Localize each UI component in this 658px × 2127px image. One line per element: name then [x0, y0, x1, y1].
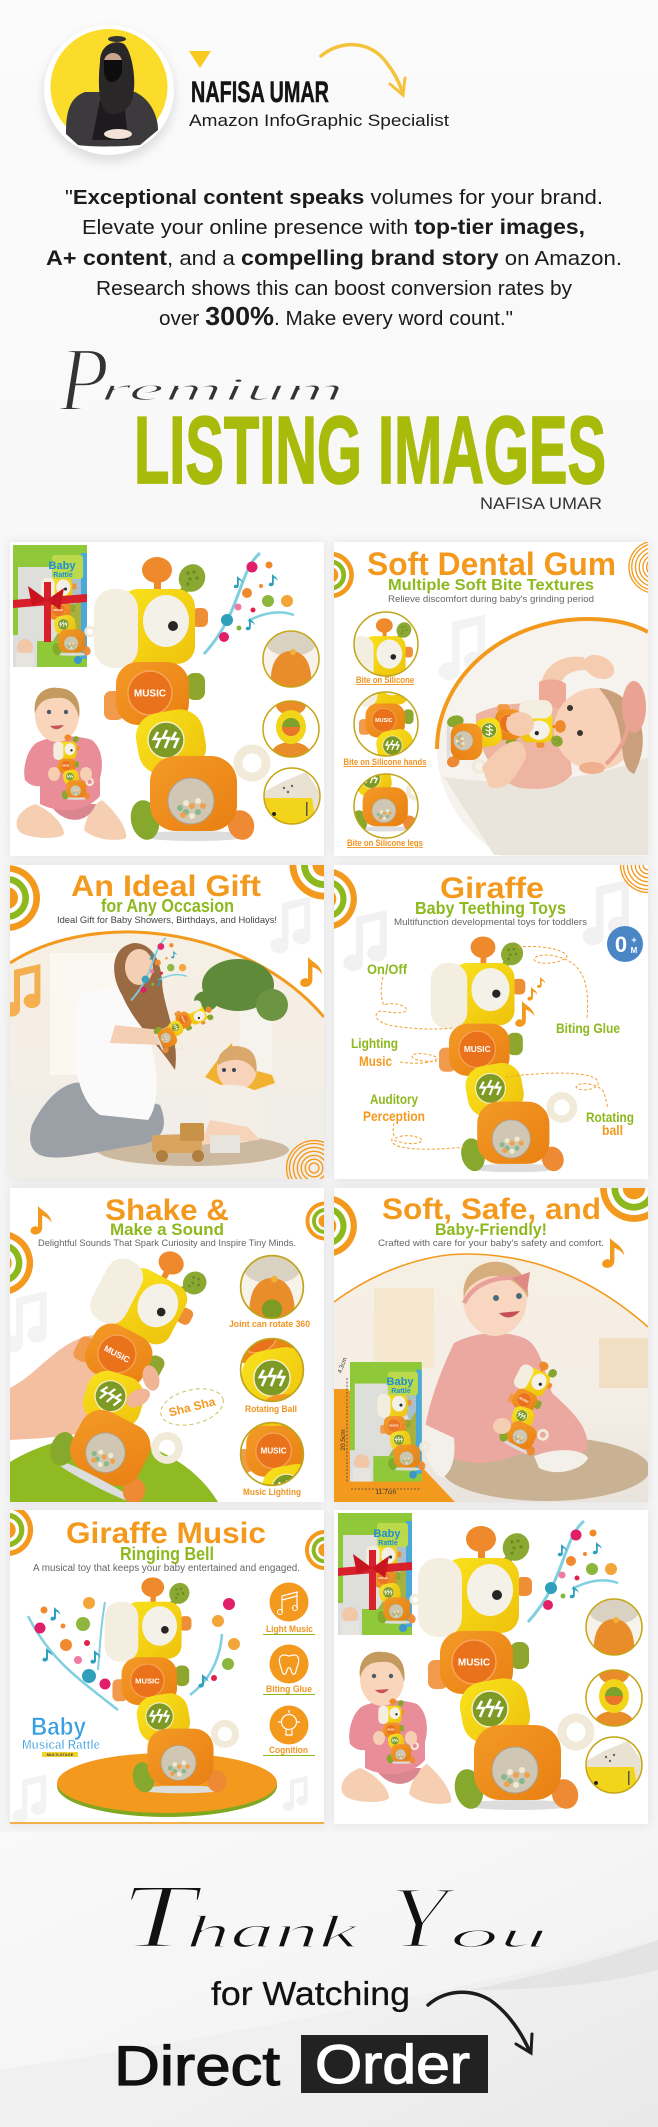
label: music: Music — [359, 1053, 392, 1069]
green hill — [10, 1436, 218, 1502]
icon: orange note — [602, 1238, 624, 1268]
hand holding toy — [10, 1228, 259, 1515]
brand badge: Baby — [31, 1713, 86, 1741]
photo: mother and baby — [10, 932, 324, 1179]
label: auditory: Auditory — [370, 1091, 418, 1107]
detail: bite on silicone hands: Bite on Silicone hands — [344, 757, 426, 767]
subtitle: Multiple Soft Bite Textures — [388, 577, 594, 594]
sound label: Sha Sha — [167, 1394, 217, 1420]
panel: giraffe music ringing bell — [10, 1510, 324, 1824]
detail circle: neck joint — [263, 630, 319, 687]
badge: age 0+ months: 0 — [615, 932, 627, 957]
brand badge — [22, 1713, 100, 1757]
quote text block: "Exceptional content speaks volumes for your brand. — [65, 187, 603, 209]
subtitle: for Any Occasion — [101, 896, 234, 916]
title: Giraffe Music — [66, 1517, 266, 1550]
quote text block — [46, 187, 622, 331]
detail circle: rotating ball — [585, 1669, 643, 1727]
callout leader lines — [376, 946, 608, 1149]
icon: light music: Light Music — [266, 1624, 313, 1634]
detail: music lighting: Music Lighting — [243, 1487, 301, 1497]
text: for watching: for Watching — [211, 1975, 410, 2012]
heading: Thank You script: ou — [450, 1915, 548, 1955]
triangle marker — [189, 51, 211, 68]
photo: baby with teether — [437, 619, 658, 879]
orange corner wedge — [334, 1389, 455, 1502]
subtitle: Ringing Bell — [120, 1544, 214, 1564]
label: rotating ball: Rotating — [586, 1109, 634, 1125]
quote text block: over 300%. Make every word count." — [159, 301, 513, 331]
description: A musical toy that keeps your baby entertained and engaged. — [33, 1563, 300, 1574]
footer background — [0, 1832, 658, 2127]
retail box with dimensions: 11.7cm — [376, 1489, 396, 1496]
heading: Premium script: P — [58, 328, 109, 430]
heading: Thank You script: T — [120, 1865, 204, 1967]
icon: biting glue — [263, 1644, 315, 1695]
retail box with ribbon — [13, 545, 94, 667]
button text: direct order — [114, 2033, 488, 2097]
icon: biting glue: Biting Glue — [266, 1684, 312, 1694]
detail circle: neck joint — [586, 1598, 642, 1655]
author credit: NAFISA UMAR — [480, 494, 602, 513]
panel: soft, safe, baby-friendly — [334, 1188, 648, 1502]
icon: orange note — [31, 1206, 52, 1235]
photo: seated baby — [16, 688, 126, 840]
icon: music notes beside toy — [515, 977, 545, 1027]
heading: Premium script: remium — [100, 371, 344, 407]
arrow: black brush curve — [428, 1992, 532, 2053]
retail box with dimensions: 4.3cm — [337, 1357, 349, 1374]
author name: NAFISA UMAR — [191, 76, 329, 109]
detail: bite on silicone hands — [344, 691, 426, 767]
quote text block: A+ content , and a compelling brand story on Amazon. — [46, 247, 622, 270]
detail: joint rotates — [229, 1255, 310, 1329]
detail circle: rotating ball — [262, 700, 320, 758]
photo: smiling baby on rug — [334, 1254, 650, 1502]
retail box with ribbon: Baby — [49, 560, 76, 572]
badge: age 0+ months — [607, 926, 643, 962]
heading: Thank You script: hank — [186, 1906, 361, 1957]
title: Shake & — [105, 1194, 229, 1227]
detail: rotating ball: Rotating Ball — [245, 1404, 297, 1414]
arrow: yellow curve — [321, 45, 405, 95]
detail: joint rotates: Joint can rotate 360 — [229, 1319, 310, 1329]
heading: Thank You script: Y — [388, 1870, 458, 1967]
retail box with dimensions — [337, 1357, 429, 1496]
music notes — [528, 1521, 618, 1622]
retail box with ribbon: Rattle — [53, 572, 73, 579]
music notes left and right — [28, 1597, 240, 1710]
photo: seated baby — [341, 1652, 451, 1804]
badge: age 0+ months: M — [631, 946, 638, 955]
avatar portrait — [43, 25, 175, 162]
subtitle: Make a Sound — [110, 1220, 224, 1239]
retail box with ribbon — [338, 1513, 419, 1635]
title: An Ideal Gift — [71, 870, 261, 903]
quote text block: Research shows this can boost conversion rates by — [96, 278, 572, 300]
music notes — [204, 553, 294, 654]
detail: bite on silicone legs — [347, 773, 423, 848]
description: Crafted with care for your baby's safety and comfort. — [378, 1238, 604, 1249]
description: Ideal Gift for Baby Showers, Birthdays, and Holidays! — [57, 915, 277, 926]
detail circle: speaker — [586, 1737, 642, 1793]
retail box with ribbon: Rattle — [378, 1540, 398, 1547]
label: lighting: Lighting — [351, 1035, 398, 1051]
panel: soft dental gum — [334, 542, 648, 856]
quote text block: Elevate your online presence with top-tier images, — [82, 216, 585, 239]
toy: giraffe rattle — [418, 1526, 590, 1813]
badge: age 0+ months: + — [631, 935, 637, 945]
label: ball: ball — [602, 1122, 623, 1138]
label: on/off: On/Off — [367, 961, 407, 977]
panel: ideal gift — [10, 865, 324, 1179]
button text: direct order: Direct — [114, 2034, 281, 2097]
icon: faded note — [3, 964, 40, 1017]
icon: cognition — [263, 1706, 315, 1756]
panel: product overview — [10, 542, 324, 856]
sound label — [157, 1383, 227, 1431]
detail: bite on silicone — [353, 611, 419, 685]
brand badge: MULTI-STAGE — [47, 1752, 74, 1757]
title: Giraffe — [440, 872, 544, 905]
panel: giraffe features — [334, 865, 648, 1179]
retail box with ribbon: Baby — [374, 1528, 401, 1540]
detail: bite on silicone: Bite on Silicone — [356, 675, 414, 685]
subtitle: Baby-Friendly! — [435, 1220, 547, 1239]
detail circle: speaker — [264, 768, 320, 824]
label: perception: Perception — [363, 1108, 425, 1124]
retail box with dimensions: Baby — [387, 1376, 414, 1388]
orange pedestal — [57, 1753, 277, 1817]
description: Multifunction developmental toys for toddlers — [394, 917, 587, 928]
button text: direct order: Order — [315, 2033, 470, 2095]
retail box with dimensions: 20.5cm — [340, 1429, 347, 1451]
detail: rotating ball — [240, 1338, 304, 1414]
detail: music lighting — [240, 1422, 304, 1497]
toy: giraffe rattle — [105, 1577, 236, 1795]
icon: cognition: Cognition — [269, 1745, 308, 1755]
label: biting glue: Biting Glue — [556, 1020, 620, 1036]
header: author profile — [43, 25, 449, 162]
title: Soft Dental Gum — [367, 546, 616, 582]
icon: orange music note — [300, 957, 322, 987]
icon: light music — [263, 1582, 315, 1635]
brand badge: Musical Rattle — [22, 1737, 100, 1752]
detail: bite on silicone legs: Bite on Silicone legs — [347, 838, 423, 848]
title: Soft, Safe, and — [382, 1193, 601, 1226]
toy: giraffe rattle — [431, 936, 573, 1174]
panel: product overview repeat — [334, 1510, 648, 1824]
toy: giraffe rattle — [94, 557, 266, 844]
panel: shake and make a sound — [10, 1188, 324, 1502]
subtitle: Baby Teething Toys — [415, 898, 566, 918]
author role: Amazon InfoGraphic Specialist — [189, 111, 449, 130]
description: Relieve discomfort during baby's grinding period — [388, 594, 594, 605]
retail box with dimensions: Rattle — [391, 1388, 411, 1395]
description: Delightful Sounds That Spark Curiosity and Inspire Tiny Minds. — [38, 1238, 296, 1249]
